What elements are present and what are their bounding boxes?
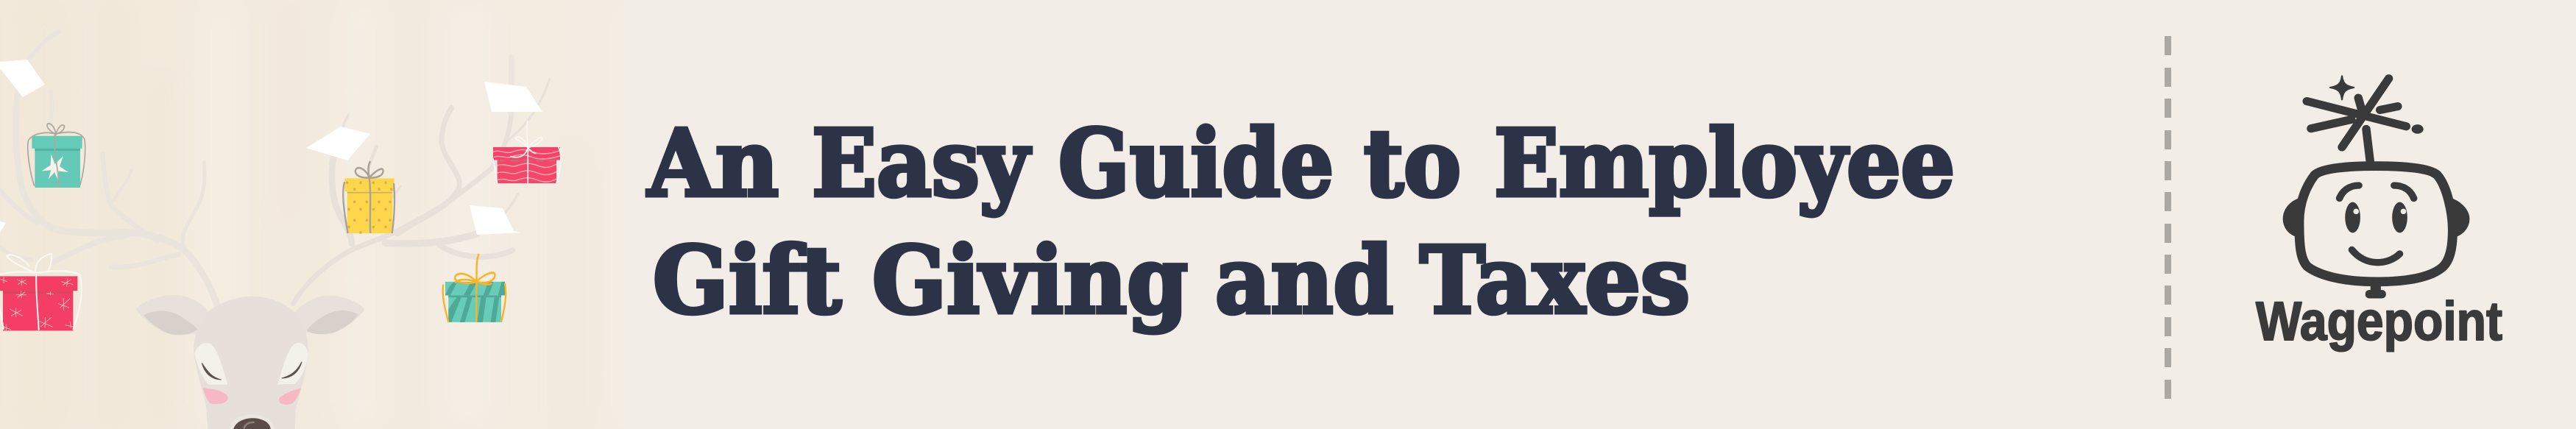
left antler: [76, 160, 220, 307]
gift: pink snowflake: [0, 254, 82, 330]
left ear: [135, 295, 211, 336]
dashed divider: [2165, 36, 2171, 399]
nose highlight: [244, 422, 254, 428]
title: [647, 109, 1955, 335]
gift: pink waves: [493, 121, 561, 183]
title: Giving: [872, 226, 1188, 335]
title: Guide: [1058, 109, 1334, 218]
title: and: [1215, 226, 1393, 335]
deer head: [135, 295, 365, 429]
wood texture: [0, 0, 629, 429]
face: [194, 297, 308, 429]
title: to: [1364, 109, 1461, 218]
gift: yellow polka: [343, 161, 394, 234]
logo robot icon: [2283, 76, 2469, 299]
title: Taxes: [1420, 226, 1690, 335]
logo: Wagepoint: [2256, 76, 2502, 352]
right cheek: [279, 388, 301, 405]
logo wordmark: Wagepoint: [2256, 291, 2502, 352]
nose: [233, 418, 271, 429]
title: Employee: [1494, 109, 1955, 218]
left cheek: [203, 388, 228, 404]
right ear: [292, 296, 365, 335]
left eye patch: [194, 343, 227, 385]
right antler: [293, 57, 550, 304]
gift: teal stripes: [443, 254, 506, 322]
right eyelash: [282, 362, 302, 378]
gift: teal star: [28, 124, 85, 188]
title: Gift: [653, 226, 841, 335]
nose surround: [230, 414, 274, 429]
title: Easy: [812, 109, 1031, 218]
white cards: [0, 60, 542, 235]
right eye patch: [277, 343, 308, 385]
title: An: [647, 109, 779, 218]
left eyelash: [202, 363, 222, 380]
panel: wood illustration: [0, 0, 629, 429]
